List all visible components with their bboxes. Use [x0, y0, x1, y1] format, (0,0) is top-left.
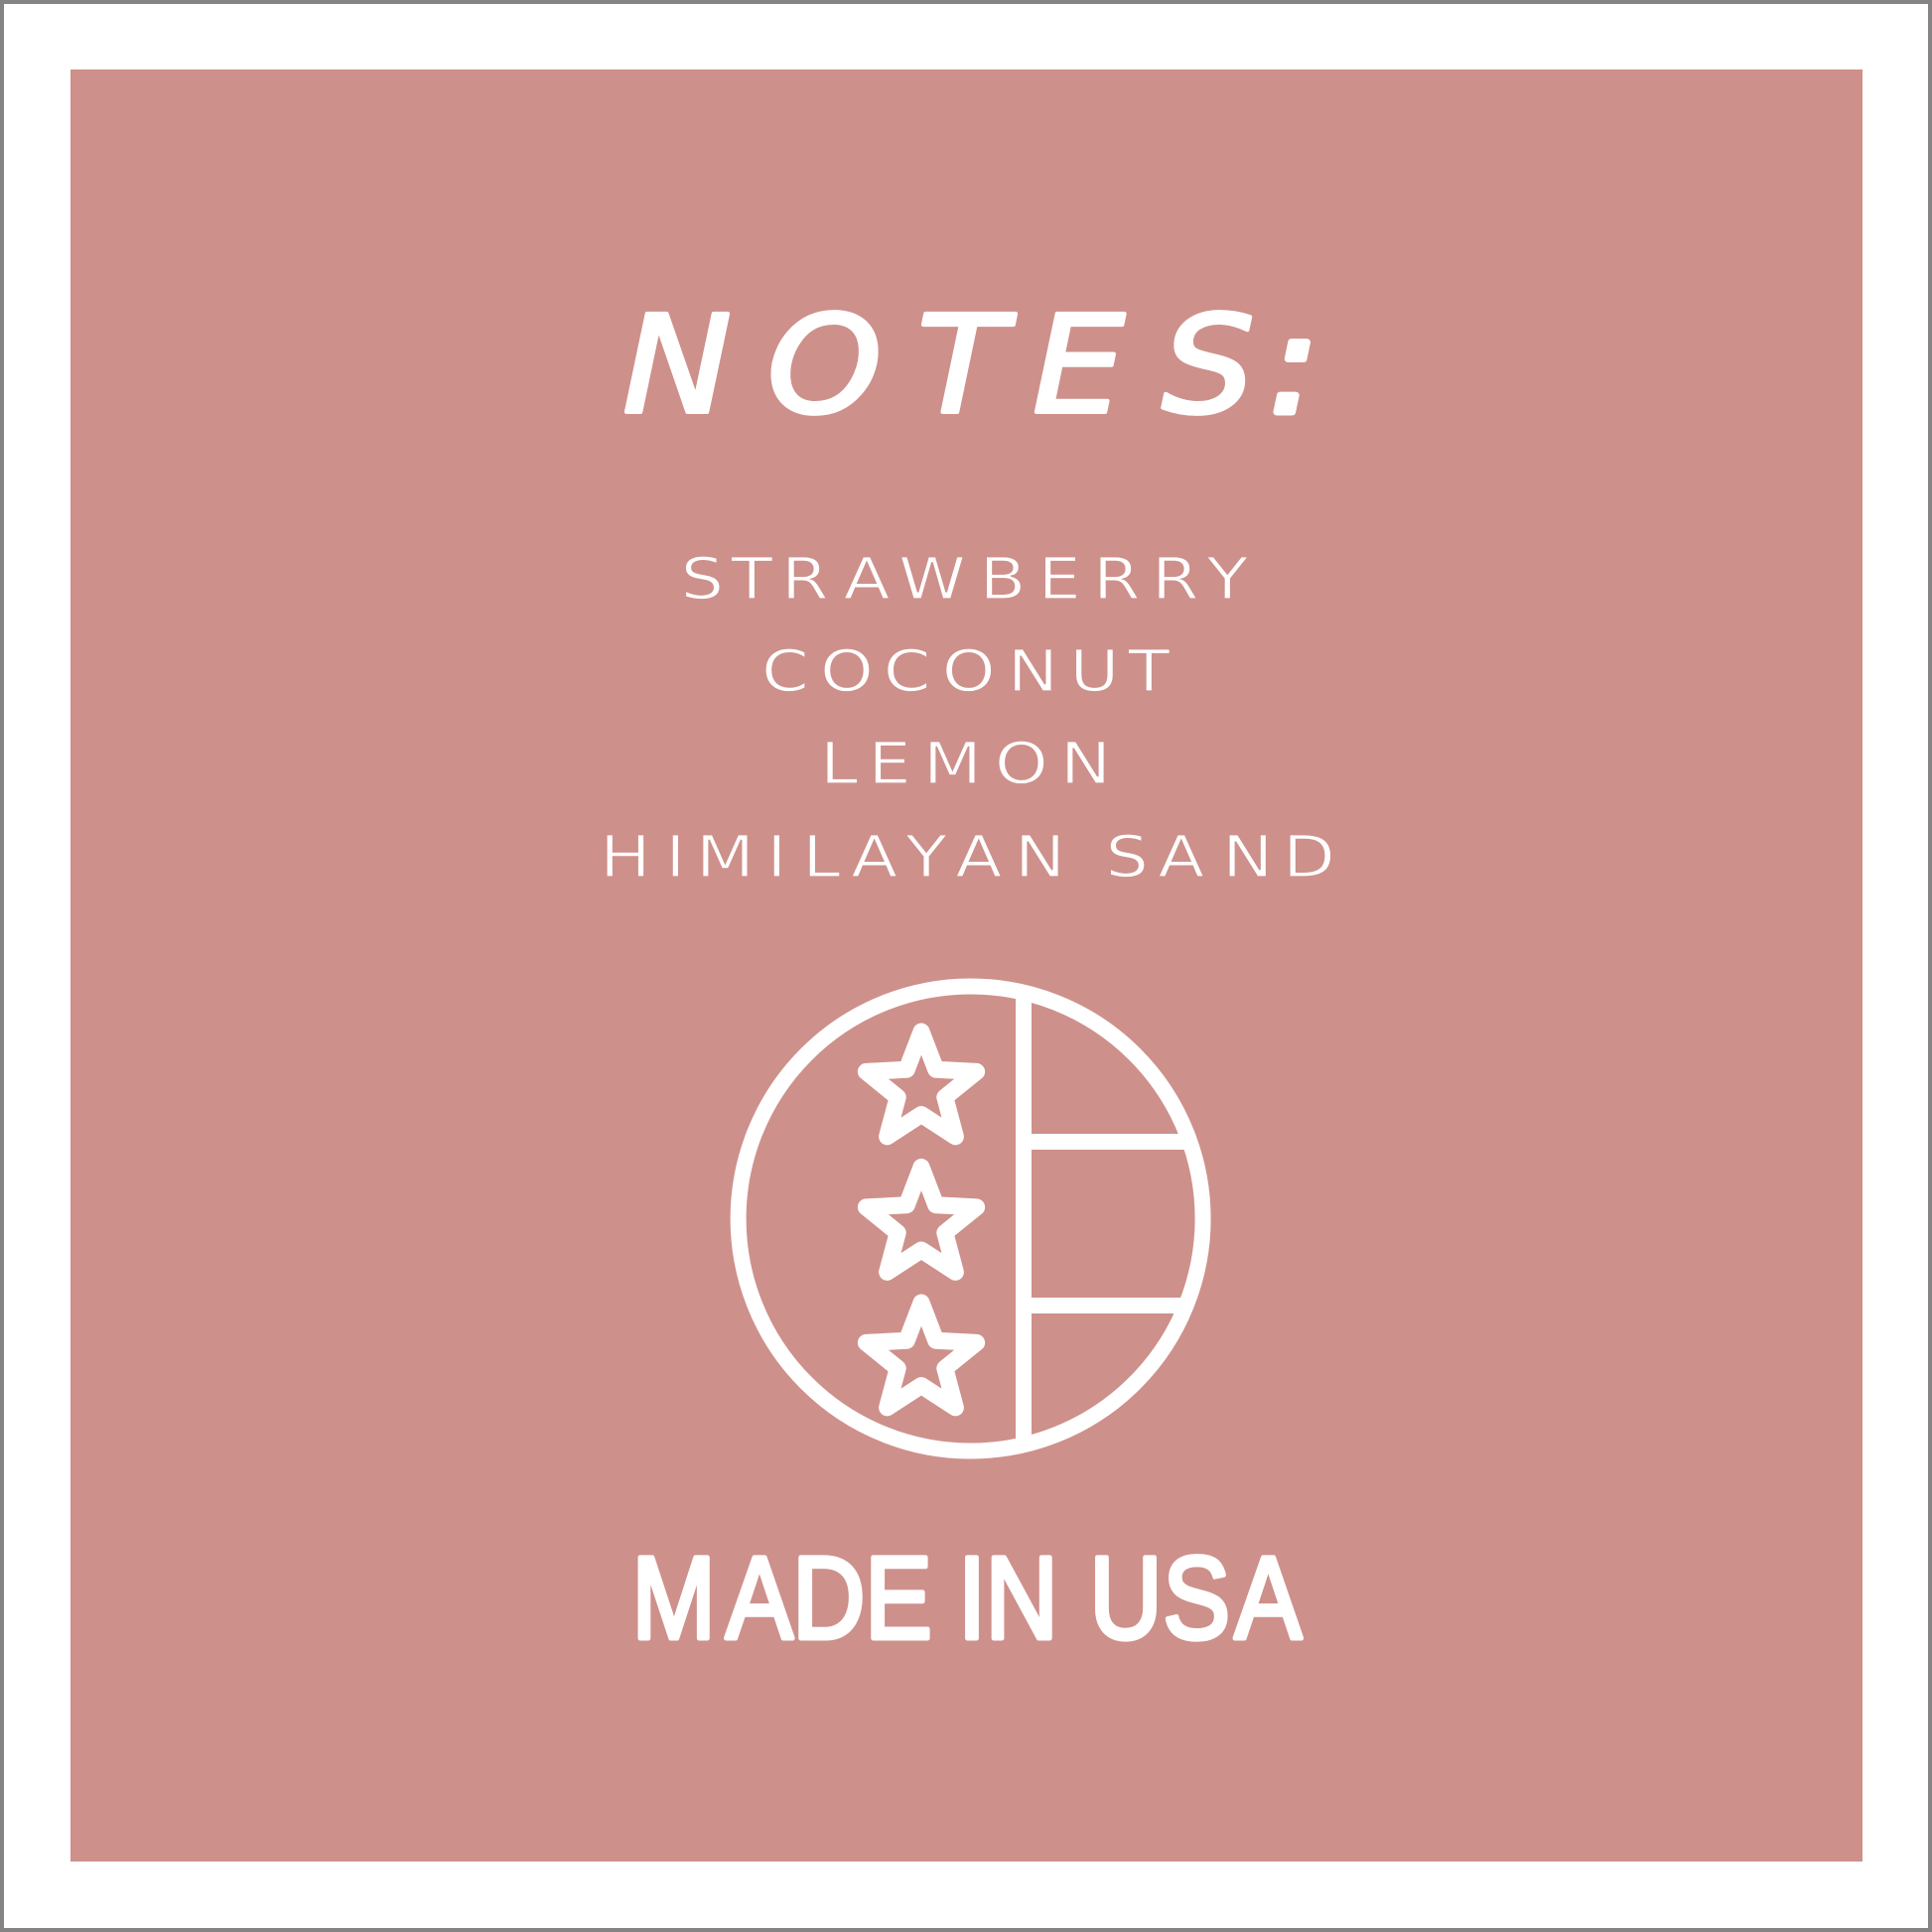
title: notes: NOTES:: [622, 288, 1318, 445]
star 1: [866, 1032, 977, 1137]
caption: made in usa: MADE IN USA: [631, 1533, 1303, 1664]
note: strawberry: STRAWBERRY: [681, 545, 1249, 613]
globe outline: [739, 987, 1203, 1451]
flag upper stripe: [1024, 1134, 1189, 1150]
flag lower stripe: [1024, 1298, 1186, 1313]
icon: american flag globe: [739, 987, 1203, 1451]
list of scent notes: [600, 545, 1335, 891]
flag stars: [866, 1032, 977, 1408]
note: himilayan sand: HIMILAYAN SAND: [600, 823, 1335, 891]
star 2: [866, 1168, 977, 1272]
note: coconut: COCONUT: [761, 637, 1171, 705]
note: lemon: LEMON: [820, 730, 1111, 797]
flag divider: [1016, 991, 1032, 1447]
star 3: [866, 1303, 977, 1408]
